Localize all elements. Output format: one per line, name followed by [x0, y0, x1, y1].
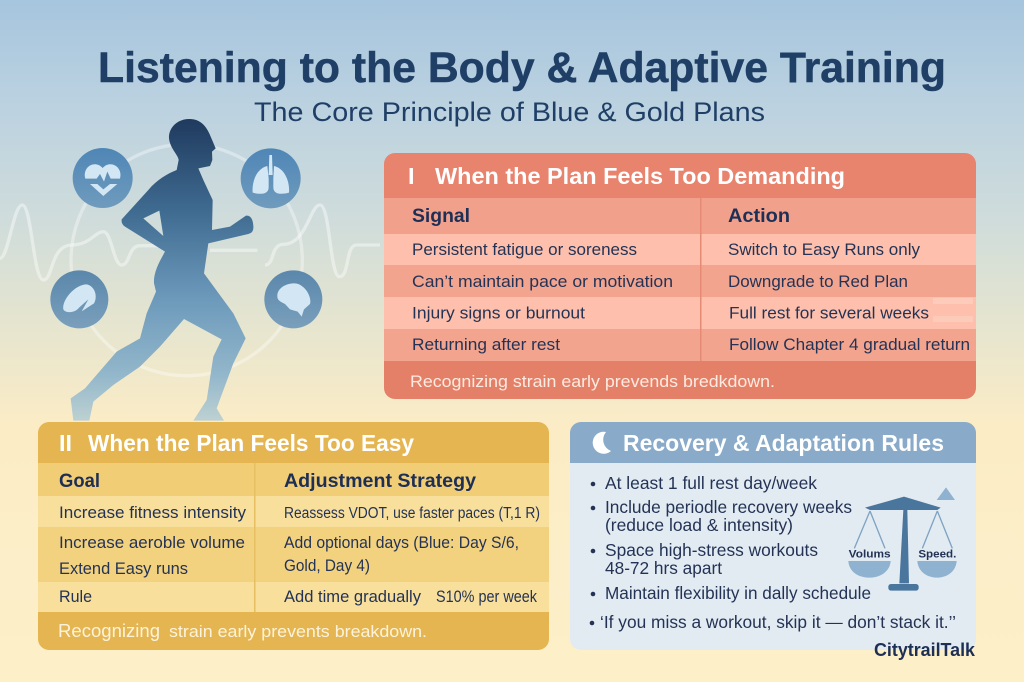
bullet list: ‘If you miss a workout, skip it — don’t stack it.’’: [600, 612, 956, 632]
yellow panel header band: [38, 422, 549, 463]
goal list: Increase fitness intensity: [59, 503, 246, 522]
runner silhouette: [71, 119, 253, 421]
adjustment strategy list: Add optional days (Blue: Day S/6,: [284, 533, 519, 552]
panel: when the plan feels too easy: [38, 422, 549, 650]
yellow panel footer note: strain early prevents breakdown.: [169, 622, 427, 641]
goal list: Rule: [59, 587, 92, 606]
blue panel header band: [570, 422, 976, 463]
adjustment strategy list: Add time gradually: [284, 587, 421, 606]
yellow panel footer note: Recognizing: [58, 621, 160, 641]
adjustment strategy list: Gold, Day 4): [284, 556, 370, 575]
signal list: [412, 240, 673, 354]
bullet list: Include periodle recovery weeks: [605, 497, 852, 517]
red table rows: [384, 198, 976, 361]
yellow panel footer band: [38, 612, 549, 650]
adjustment strategy list: Reassess VDOT, use faster paces (T,1 R): [284, 505, 540, 522]
blue heading: Recovery & Adaptation Rules: [623, 430, 944, 456]
panel: recovery and adaptation rules: [570, 422, 976, 650]
red table header row: [384, 198, 976, 234]
yellow heading: When the Plan Feels Too Easy: [88, 430, 414, 456]
adjustment strategy list: [284, 505, 540, 606]
column heading: adjustment strategy: Adjustment Strategy: [284, 471, 476, 492]
column heading: action: Action: [728, 206, 790, 227]
panel: when the plan feels too demanding: [384, 153, 976, 399]
goal list: Increase aeroble volume: [59, 533, 245, 552]
column heading: signal: Signal: [412, 206, 470, 227]
red panel header band: [384, 153, 976, 198]
bullet list: 48-72 hrs apart: [605, 558, 722, 578]
yellow table rows: [38, 463, 549, 612]
bullet list: [590, 473, 956, 632]
signal list: Persistent fatigue or soreness: [412, 240, 637, 259]
signal list: Can’t maintain pace or motivation: [412, 272, 673, 291]
blue panel body: [570, 422, 976, 650]
title: Listening to the Body & Adaptive Training: [98, 44, 946, 92]
column heading: goal: Goal: [59, 471, 100, 492]
decorative ring: [71, 144, 302, 376]
adjustment strategy list: S10% per week: [436, 587, 537, 606]
icon: lungs: [241, 148, 301, 208]
goal list: Extend Easy runs: [59, 559, 188, 578]
yellow panel footer note: [60, 624, 426, 641]
red panel footer note: Recognizing strain early prevends bredkdown.: [410, 372, 775, 391]
goal list: [59, 503, 246, 606]
yellow table header row: [38, 463, 549, 496]
icon: balance scale: Volums: [849, 549, 891, 561]
bullet list: Space high-stress workouts: [605, 540, 818, 560]
icon: balance scale: Speed.: [918, 549, 956, 561]
yellow heading numeral: II: [59, 430, 72, 456]
bullet list: At least 1 full rest day/week: [605, 473, 817, 493]
bullet list: Maintain flexibility in dally schedule: [605, 583, 871, 603]
action list: Switch to Easy Runs only: [728, 240, 920, 259]
heartbeat line: [0, 205, 380, 280]
red panel footer band: [384, 361, 976, 399]
signal list: Injury signs or burnout: [412, 304, 585, 322]
subtitle: The Core Principle of Blue & Gold Plans: [254, 97, 765, 127]
action list: Full rest for several weeks: [729, 304, 929, 322]
runner illustration: [0, 119, 380, 421]
red heading: When the Plan Feels Too Demanding: [435, 163, 845, 189]
icon: heart: [73, 148, 133, 208]
red heading numeral: I: [408, 163, 415, 189]
icon: balance scale: [848, 487, 957, 591]
icon: stomach: [50, 270, 108, 328]
action list: Follow Chapter 4 gradual return: [729, 335, 970, 354]
brand label: CitytrailTalk: [874, 640, 976, 660]
bullet list: (reduce load & intensity): [605, 515, 793, 535]
action list: Downgrade to Red Plan: [728, 272, 908, 291]
action list: [728, 240, 970, 354]
icon: brain: [264, 270, 322, 328]
icon: moon: [593, 432, 611, 454]
signal list: Returning after rest: [412, 335, 560, 354]
